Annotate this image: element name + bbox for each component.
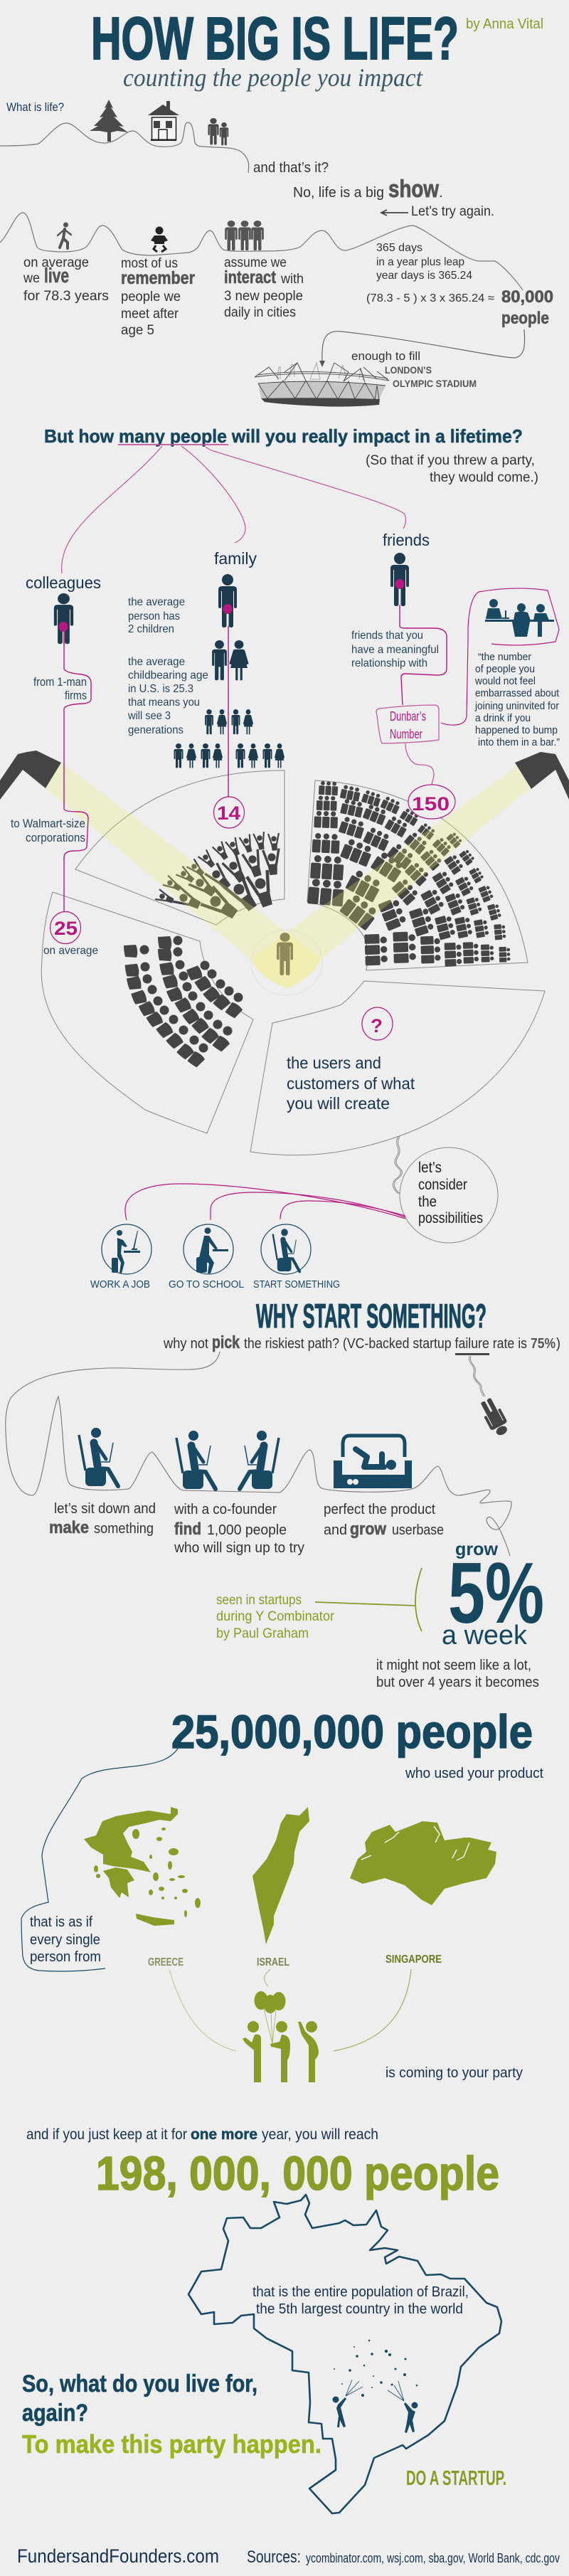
choice: go to school [184,1224,233,1274]
left stage light [0,751,61,800]
text: stadium note: enough to fill [351,349,420,363]
choice: start something [261,1224,311,1274]
text: friends definition [351,630,439,669]
text: life is a big show: show [388,176,439,203]
icon: three people [225,221,264,250]
subtitle: counting the people you impact [123,63,423,92]
text: and that's it: and that’s it? [253,160,329,176]
label: colleagues: colleagues [26,573,101,592]
text: life is a big show [293,176,443,203]
icon: falling man [477,1396,511,1438]
callout: 25: 25 [54,918,78,939]
spotlight beams [46,763,530,988]
labels: countries: GREECE [148,1956,184,1968]
icon: house [148,101,179,141]
hill line two [0,213,523,290]
question: what is life: What is life? [6,100,64,114]
labels: three choices: START SOMETHING [253,1278,340,1290]
text: find 1,000 people [174,1502,304,1556]
text: every single person: that is as if [30,1914,92,1930]
labels: countries: SINGAPORE [385,1954,442,1966]
sector: friends [307,780,528,970]
text: one more year: and if you just keep at it for [26,2126,187,2143]
crowd: friends seats [307,781,511,967]
text: we live: we [23,271,40,286]
text: every single person: every single [30,1932,100,1948]
text: riskiest path [163,1332,560,1352]
bracket [315,1568,422,1631]
callout: Dunbar's Number: Dunbar’s [390,709,426,723]
text: population of Brazil [252,2284,469,2317]
journey line [6,1352,511,1556]
person in the spotlight [277,933,293,975]
icon: co-founders [176,1431,279,1489]
connector to 150 [405,743,434,785]
text: we interact [224,255,304,320]
text: we remember: people we [121,290,181,304]
arrow to stadium [319,329,525,367]
map: Brazil outline [188,2195,501,2513]
stat: grow 5% a week [442,1539,544,1650]
map: Singapore [350,1821,496,1905]
text: one more year [26,2126,378,2143]
text: find 1,000 people: find [174,1520,201,1539]
text: we remember: meet after [121,307,179,322]
text: find 1,000 people: with a co-founder [174,1502,277,1517]
text: grow userbase: grow [350,1520,386,1539]
number: 198,000,000 people: 198, 000, 000 people [96,2147,499,2200]
text: family generations: 2 children [128,623,174,635]
text: riskiest path: why not [163,1336,208,1352]
text: make something [49,1501,156,1537]
text: find 1,000 people: who will sign up to try [174,1540,304,1556]
text: we live [23,255,109,304]
connectors to choices [125,1184,405,1220]
bar speech outline [441,588,559,725]
text: riskiest path: ) [556,1336,560,1352]
text: riskiest path: 75% [531,1336,555,1352]
stage ring [251,930,322,995]
text: on average: on average [43,945,98,957]
text: grow userbase [324,1502,444,1539]
text: family generations: the average [128,656,185,668]
bubble: let's consider [400,1147,498,1243]
text: party aside [366,453,538,485]
text: who used your product: who used your product [405,1766,543,1781]
text: to make this party happen: To make this party happen. [22,2429,321,2459]
text: let's try again: Let’s try again. [411,204,494,219]
friends figure and line [390,553,447,705]
labels: countries: ISRAEL [257,1956,289,1968]
text: party aside: (So that if you threw a party, [366,453,535,468]
text: Dunbar quote: “the number [478,651,531,663]
text: users and customers: you will create [287,1094,390,1113]
callout: 14: 14 [217,802,240,824]
callout: 150 [408,785,455,819]
text: grow userbase: and [324,1522,347,1538]
family tree figures [174,574,284,797]
text: one more year: one more [191,2126,257,2143]
text: Y Combinator [216,1593,335,1641]
icon: confetti party [333,2340,418,2433]
text: population of Brazil: the 5th largest country in the world [256,2301,463,2317]
line to every single person [21,1749,178,1971]
squiggle: fall [469,1356,485,1396]
callout: Dunbar's Number: Number [390,727,422,741]
text: Dunbar quote: joining uninvited for [474,700,559,712]
stat: grow 5% a week: a week [442,1621,528,1650]
footer: sources [247,2548,560,2567]
text: Dunbar quote: would not feel [474,675,536,687]
crowd: family seats [155,832,282,923]
underline and connectors [62,445,405,573]
footer: sources: Sources: [247,2548,301,2567]
callout: question mark [362,1007,393,1040]
text: life is a big show: . [439,185,443,201]
callout: question mark: ? [371,1015,383,1037]
icon: tree [90,100,128,142]
failure ledge [455,1353,489,1355]
text: over 4 years: but over 4 years it becomes [376,1675,539,1690]
text: colleagues range: corporations [26,831,85,844]
labels: three choices [90,1278,340,1290]
text: riskiest path: pick [212,1332,240,1352]
text: users and customers: the users and [287,1054,381,1072]
text: Dunbar quote: into them in a bar.” [478,736,560,748]
icon: walking person [58,222,71,248]
number: 80,000 people: people [501,309,549,328]
text: over 4 years: it might not seem like a lot, [376,1658,531,1673]
text: Y Combinator: during Y Combinator [216,1609,335,1624]
text: population of Brazil: that is the entire population of Brazil, [252,2284,469,2300]
text: coming to your party: is coming to your party [385,2065,523,2081]
text: we live: on average [23,255,89,270]
callout: 14 [213,797,245,828]
text: we remember: most of us [121,256,178,271]
squiggle connector [393,1136,402,1194]
icon: two people [208,118,228,145]
callout: 25 [50,912,81,943]
text: friends definition: relationship with [351,657,427,669]
text: family generations: person has [128,610,180,622]
text: stadium note: LONDON’S [385,364,432,376]
sector: family [75,770,284,925]
text: we live: live [44,265,69,287]
text: we live: for 78.3 years [23,289,109,304]
map: Greece [84,1807,201,1926]
map: Israel [252,1807,309,1944]
label: friends: friends [383,531,430,549]
text: friends definition: have a meaningful [351,644,439,656]
text: life is a big show: No, life is a big [293,185,384,201]
text: every single person: person from [30,1949,101,1965]
text: we interact: 3 new people [224,289,303,304]
sector: colleagues [41,892,253,1133]
number: 80,000 people: 80,000 [501,287,553,307]
text: make something: let’s sit down and [54,1501,156,1517]
text: party aside: they would come.) [430,470,538,485]
text: make something: something [94,1521,154,1537]
colleagues figure and line [54,593,91,912]
bubble: let's consider: the [418,1194,437,1210]
text: grow userbase: perfect the product [324,1502,435,1517]
text: colleagues range: from 1-man [33,675,87,689]
text: family generations [127,596,208,736]
icon: people at a bar [485,599,554,637]
text: day arithmetic: year days is 365.24 [376,270,472,282]
text: family generations: in U.S. is 25.3 [128,683,193,695]
text: family generations: will see 3 [127,710,171,722]
text: family generations: the average [128,596,185,608]
hill line one [0,122,249,173]
labels: three choices: WORK A JOB [90,1278,150,1290]
text: we interact: assume we [224,255,287,270]
text: what do you live for: So, what do you live for, [22,2370,257,2397]
number: 80,000 people [501,287,553,328]
text: day arithmetic [366,242,494,304]
icon: sit down founder [79,1428,118,1486]
text: family generations: that means you [128,696,200,709]
text: we remember: age 5 [121,323,154,338]
author credit: by Anna Vital [466,16,543,32]
text: what do you live for [22,2370,257,2427]
labels: three choices: GO TO SCHOOL [169,1278,244,1290]
text: Dunbar quote [474,651,560,748]
text: every single person [30,1914,101,1965]
number: 25,000,000 people: 25,000,000 people [171,1705,533,1758]
connectors to party [169,1969,411,2051]
text: colleagues range: to Walmart-size [11,817,85,830]
bubble: let's consider: consider [418,1177,467,1193]
text: day arithmetic: in a year plus leap [376,256,464,268]
text: friends definition: friends that you [351,630,423,642]
text: one more year: year, you will reach [262,2126,378,2143]
text: we interact: daily in cities [224,305,296,320]
icon: olympic stadium [255,363,389,407]
bubble: let's consider: let’s [418,1160,442,1176]
text: grow userbase: userbase [392,1522,444,1538]
text: make something: make [49,1518,89,1537]
footer: site name: FundersandFounders.com [17,2545,219,2567]
text: colleagues range [11,675,87,844]
labels: countries [148,1954,442,1968]
text: Y Combinator: by Paul Graham [216,1626,309,1641]
choice: work a job [102,1224,151,1274]
text: we interact: with [280,272,304,287]
callout: Dunbar's Number [376,705,439,743]
label: family: family [214,549,257,568]
icon: product person in tv [334,1436,412,1488]
text: Y Combinator: seen in startups [216,1593,302,1608]
text: users and customers [287,1054,415,1113]
text: day arithmetic: 365 days [376,242,422,254]
sector: users [250,981,545,1155]
text: family generations: generations [128,724,184,736]
text: colleagues range: firms [65,689,87,702]
text: riskiest path: the riskiest path? (VC-backed startup failure rate is [244,1336,527,1352]
text: users and customers: customers of what [287,1074,415,1093]
text: we remember: remember [121,268,195,288]
text: stadium note: OLYMPIC STADIUM [393,378,477,389]
callout: 150: 150 [412,793,450,815]
text: family generations: childbearing age [128,669,208,682]
icon: baby [151,226,168,252]
text: Dunbar quote: of people you [475,663,535,675]
text: we remember [121,256,195,338]
text: day arithmetic: (78.3 - 5 ) x 3 x 365.24 ≈ [366,292,494,304]
text: Dunbar quote: a drink if you [475,712,531,724]
text: Dunbar quote: happened to bump [475,724,558,736]
arrow: let's try again [381,210,408,216]
text: do a startup: DO A STARTUP. [406,2467,506,2490]
stat: grow 5% a week: grow [455,1539,499,1559]
text: find 1,000 people: 1,000 people [207,1522,287,1538]
text: over 4 years [376,1658,539,1690]
bubble: let's consider: possibilities [418,1210,483,1226]
text: we interact: interact [224,267,277,287]
icon: party people with balloons [243,1991,319,2082]
text: stadium note [351,349,477,389]
crowd: colleagues seats [124,936,243,1069]
text: what do you live for: again? [22,2400,88,2427]
heading: how many people: But how many people will you really impact in a lifetime? [44,425,523,447]
text: Dunbar quote: embarrassed about [475,687,560,699]
right stage light [515,752,569,800]
